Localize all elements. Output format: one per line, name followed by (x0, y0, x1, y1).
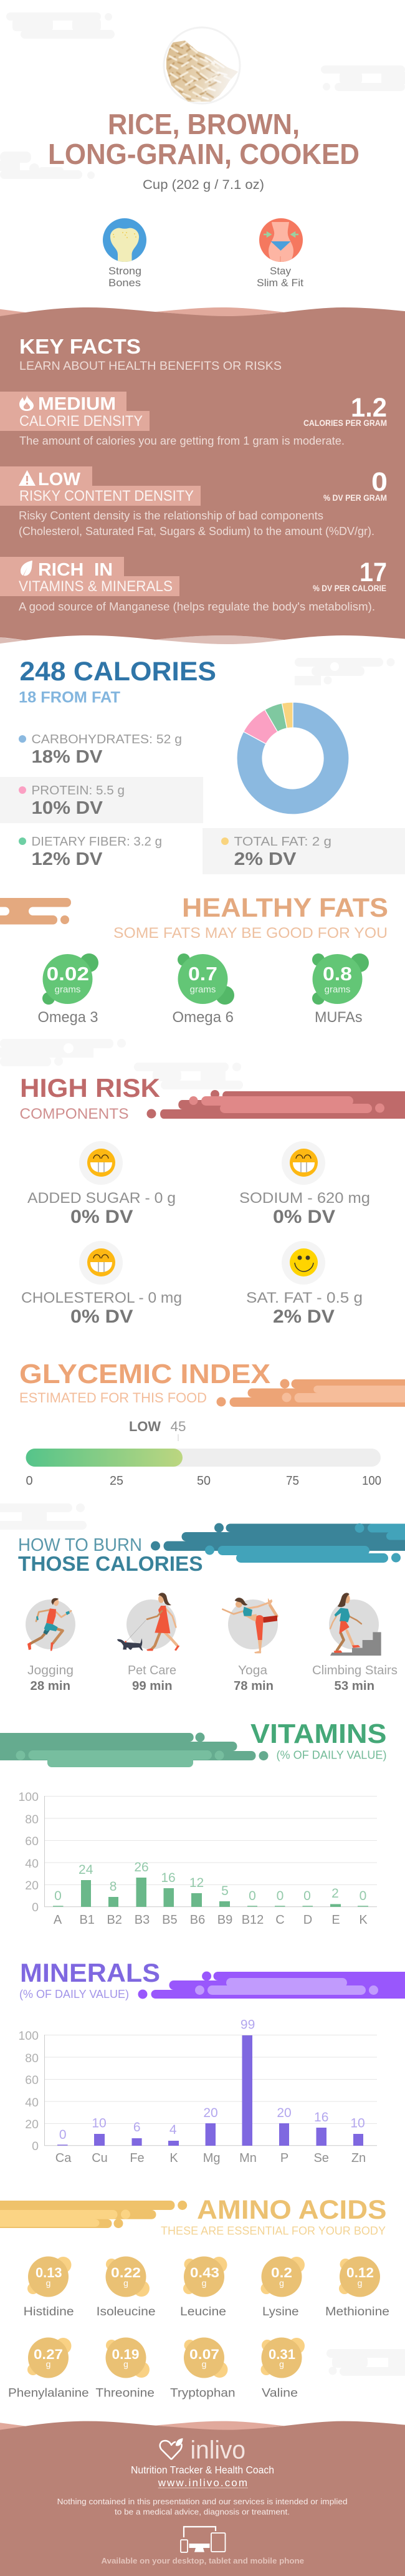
bar chart: vitamins (18, 1790, 377, 1927)
risk: saturated fat: 2% DV (273, 1306, 335, 1327)
icon: leaf (21, 561, 32, 576)
macro: dietary fiber: DIETARY FIBER: 3.2 g (31, 835, 162, 849)
amino: leucine (180, 2256, 227, 2318)
activity: pet care: 99 min (132, 1679, 172, 1693)
bar chart: vitamins: 40 (25, 1857, 39, 1871)
heading: 248 calories (19, 657, 216, 706)
decoration: vitamins streak (0, 1732, 268, 1767)
figure: jogger (27, 1598, 71, 1651)
fact: risky content density: Risky Content density is the relationship of bad components (19, 509, 323, 522)
heading: vitamins: (% OF DAILY VALUE) (277, 1749, 386, 1761)
amino: valine: Valine (262, 2387, 298, 2400)
fact: calorie density: CALORIES PER GRAM (303, 418, 387, 428)
heading: how to burn those calories (18, 1535, 203, 1575)
heading: healthy fats (113, 893, 388, 942)
section: minerals (18, 1958, 405, 2165)
bar chart: minerals: 10 (350, 2116, 365, 2131)
fact: rich in vitamins and minerals: 17 (360, 557, 387, 587)
gauge: glycemic value: 25 (110, 1474, 123, 1488)
fat: mufas: grams (325, 984, 350, 995)
bar chart: minerals: 0 (32, 2139, 39, 2153)
decoration: glycemic streak (217, 1379, 405, 1407)
bar chart: vitamins: 2 (331, 1886, 339, 1901)
decoration: burn streak (151, 1523, 405, 1563)
bar chart: minerals: 80 (25, 2052, 39, 2065)
macro: carbohydrates: 18% DV (31, 747, 103, 767)
bar chart: vitamins: D (303, 1913, 312, 1927)
label: Slim & Fit (257, 277, 303, 289)
bar chart: vitamins: 26 (134, 1860, 149, 1874)
fat: omega 6 (172, 953, 234, 1026)
risk: sodium: SODIUM - 620 mg (239, 1190, 370, 1207)
figure: woman in yoga pose (222, 1598, 277, 1653)
gauge: glycemic value: 100 (362, 1474, 381, 1488)
risk: saturated fat: SAT. FAT - 0.5 g (246, 1290, 363, 1306)
gauge: glycemic value (26, 1419, 381, 1488)
activity: pet care: Pet Care (128, 1664, 176, 1677)
title: LONG-GRAIN, COOKED (48, 138, 360, 170)
decoration: minerals streak (138, 1972, 405, 1999)
background cloud: burn calories (0, 1503, 87, 1530)
amino: histidine: Histidine (24, 2305, 74, 2318)
bar chart: vitamins: B5 (162, 1913, 178, 1927)
risk: cholesterol (21, 1241, 182, 1327)
activity: climbing stairs: 53 min (334, 1679, 374, 1693)
fat: mufas: MUFAs (315, 1009, 363, 1026)
fat: omega 3 (37, 953, 98, 1026)
amino: phenylalanine: g (46, 2359, 50, 2369)
heading: amino acids: THESE ARE ESSENTIAL FOR YOUR BODY (161, 2225, 386, 2237)
icon: slim waist (259, 218, 303, 263)
bar chart: vitamins: B6 (190, 1913, 205, 1927)
amino: histidine: g (46, 2278, 50, 2288)
tagline and website: Nutrition Tracker & Health Coach (131, 2464, 274, 2476)
bar chart: vitamins: A (54, 1913, 62, 1927)
heading: minerals: MINERALS (20, 1958, 160, 1987)
heading: how to burn those calories: HOW TO BURN (18, 1535, 142, 1555)
fat: mufas: 0.8 (323, 963, 352, 985)
gauge: glycemic value: LOW (129, 1419, 161, 1434)
background cloud: calories (295, 658, 395, 685)
bar chart: vitamins: 8 (110, 1879, 117, 1894)
bar chart: minerals: 0 (59, 2128, 67, 2142)
fact: rich in vitamins and minerals: VITAMINS & MINERALS (19, 578, 173, 595)
heading: minerals (19, 1958, 160, 2000)
heading: key facts (19, 335, 282, 373)
bar chart: minerals: Mg (203, 2151, 220, 2165)
bar chart: vitamins: 0 (249, 1889, 256, 1903)
bar chart: vitamins: K (359, 1913, 368, 1927)
risk: cholesterol: 0% DV (70, 1306, 133, 1327)
heading: glycemic index: GLYCEMIC INDEX (19, 1359, 270, 1389)
bar chart: minerals: Ca (55, 2151, 72, 2165)
icon: grinning face (79, 1141, 123, 1185)
icon: devices (181, 2527, 226, 2552)
tagline and website: www.inlivo.com (158, 2477, 247, 2489)
bar chart: vitamins: B1 (79, 1913, 95, 1927)
risk: added sugar: 0% DV (70, 1207, 133, 1227)
macro: protein: 10% DV (31, 798, 103, 818)
activity: jogging (26, 1598, 75, 1693)
amino: methionine: Methionine (325, 2305, 389, 2318)
bar chart: vitamins: 20 (25, 1879, 39, 1893)
benefit: strong bones (103, 218, 146, 289)
label: Bones (108, 277, 141, 289)
background cloud: high risk centre (134, 1063, 243, 1089)
bar chart: vitamins: 0 (54, 1889, 62, 1903)
amino: lysine: g (279, 2278, 284, 2288)
figure: woman climbing stairs (330, 1593, 381, 1656)
bar chart: minerals: 10 (92, 2116, 107, 2131)
section: high risk (20, 1073, 405, 1327)
decoration: healthy fats streak (0, 898, 72, 924)
amino: methionine: 0.12 (346, 2265, 374, 2280)
fact: rich in vitamins and minerals: % DV PER CALORIE (313, 584, 386, 593)
amino: methionine: g (358, 2278, 362, 2288)
bar chart: vitamins: B9 (217, 1913, 232, 1927)
gauge: glycemic value: 45 (171, 1419, 186, 1434)
icon: grinning face (79, 1241, 123, 1285)
macro: carbohydrates: CARBOHYDRATES: 52 g (31, 733, 182, 746)
bar chart: minerals: Fe (130, 2151, 145, 2165)
bar chart: minerals: 4 (169, 2123, 177, 2137)
heading: healthy fats: SOME FATS MAY BE GOOD FOR YOU (113, 925, 388, 942)
amino: lysine (260, 2256, 305, 2318)
background cloud: amino acids (326, 2349, 405, 2376)
risk: added sugar (27, 1141, 176, 1227)
fact: risky content density: LOW (38, 470, 81, 490)
risk: added sugar: ADDED SUGAR - 0 g (27, 1190, 176, 1207)
fat: omega 6: Omega 6 (172, 1009, 234, 1026)
title: RICE, BROWN, (108, 108, 300, 140)
icon: grinning face (282, 1141, 325, 1185)
panel: key facts (0, 307, 405, 644)
macro: protein: PROTEIN: 5.5 g (31, 784, 125, 798)
macro: total fat (202, 828, 405, 874)
amino: phenylalanine: Phenylalanine (8, 2387, 89, 2400)
fat: omega 3: grams (55, 984, 80, 995)
gauge: glycemic value: 75 (286, 1474, 299, 1488)
heading: amino acids (161, 2195, 386, 2237)
amino: valine (260, 2337, 305, 2400)
figure: woman walking dog (117, 1593, 179, 1651)
bar chart: minerals: P (280, 2151, 288, 2165)
section: how to burn those calories (18, 1523, 405, 1693)
bar chart: minerals: K (169, 2151, 178, 2165)
macro: dietary fiber (19, 835, 162, 869)
heading: healthy fats: HEALTHY FATS (182, 893, 388, 923)
label (108, 266, 141, 289)
fat: mufas (312, 953, 369, 1026)
fact: calorie density: 1.2 (351, 393, 387, 423)
heading: glycemic index (19, 1359, 270, 1406)
fat: omega 3: 0.02 (47, 963, 89, 985)
bar chart: vitamins: E (331, 1913, 340, 1927)
bar chart: minerals: 40 (25, 2096, 39, 2110)
amino: histidine: 0.13 (36, 2265, 62, 2280)
amino: lysine: 0.2 (271, 2265, 292, 2280)
amino: threonine (95, 2337, 155, 2400)
fat: omega 6: 0.7 (188, 963, 217, 985)
disclaimer: to be a medical advice, diagnosis or treatment. (115, 2507, 290, 2517)
macro: total fat: 2% DV (234, 849, 297, 869)
bar chart: minerals: 99 (241, 2018, 255, 2032)
heading: high risk components: COMPONENTS (20, 1106, 128, 1122)
heading: high risk components: HIGH RISK (20, 1073, 160, 1102)
icon: smiling face (282, 1241, 325, 1285)
risk: cholesterol: CHOLESTEROL - 0 mg (21, 1290, 182, 1306)
risk: saturated fat (246, 1241, 363, 1327)
bar chart: vitamins: 0 (360, 1889, 366, 1903)
background cloud: top left (6, 12, 115, 39)
macro: carbohydrates (19, 733, 182, 767)
activity: jogging: Jogging (27, 1664, 74, 1677)
background cloud: top right (321, 65, 405, 91)
amino: threonine: Threonine (95, 2387, 155, 2400)
bar chart: vitamins: 0 (303, 1889, 311, 1903)
amino: threonine: 0.19 (112, 2347, 140, 2362)
fact: calorie density: The amount of calories you are getting from 1 gram is moderate. (19, 435, 345, 447)
macro: protein (0, 777, 203, 823)
title (48, 108, 360, 170)
section: healthy fats (0, 893, 388, 1026)
bar chart: minerals: Se (313, 2151, 329, 2165)
tagline and website (131, 2464, 274, 2489)
bar chart: vitamins: 24 (79, 1863, 93, 1877)
heading: 248 calories: 18 FROM FAT (19, 688, 120, 706)
bar chart: vitamins: 100 (18, 1790, 39, 1804)
amino: valine: 0.31 (269, 2347, 295, 2362)
bar chart: minerals: Zn (351, 2151, 366, 2165)
activity: yoga: 78 min (234, 1679, 274, 1693)
amino: leucine: Leucine (180, 2305, 226, 2318)
bar chart: vitamins: 60 (25, 1835, 39, 1848)
amino: valine: g (279, 2359, 284, 2369)
amino: phenylalanine: 0.27 (34, 2347, 63, 2362)
serving size: Cup (202 g / 7.1 oz) (143, 178, 264, 192)
icon: flame (19, 395, 34, 411)
heading: how to burn those calories: THOSE CALORIES (18, 1552, 203, 1575)
heading: amino acids: AMINO ACIDS (197, 2195, 386, 2225)
amino: tryptophan: 0.07 (189, 2347, 219, 2362)
disclaimer (57, 2497, 348, 2517)
heading: vitamins (250, 1719, 386, 1761)
amino: isoleucine: 0.22 (111, 2265, 141, 2280)
amino: tryptophan: Tryptophan (170, 2387, 236, 2400)
heading: high risk components (20, 1073, 160, 1122)
section: vitamins (0, 1719, 386, 1927)
activity: yoga: Yoga (238, 1664, 268, 1677)
bar chart: minerals: Mn (239, 2151, 257, 2165)
fact: risky content density: 0 (371, 467, 388, 497)
icon: warning triangle (19, 470, 36, 486)
fact: rich in vitamins and minerals: RICH IN (38, 560, 113, 580)
availability note: Available on your desktop, tablet and mobile phone (101, 2556, 304, 2565)
fact: calorie density: CALORIE DENSITY (19, 413, 143, 430)
bar chart: vitamins: 5 (221, 1884, 229, 1898)
risk: sodium: 0% DV (273, 1207, 335, 1227)
amino: threonine: g (123, 2359, 128, 2369)
activity: jogging: 28 min (30, 1679, 70, 1693)
bar chart: minerals: 60 (25, 2073, 39, 2087)
fact: risky content density (0, 466, 388, 538)
background cloud: high risk left (0, 1039, 126, 1066)
amino: methionine (325, 2256, 389, 2318)
logo: inlivo (160, 2436, 245, 2464)
bar chart: vitamins: B3 (135, 1913, 150, 1927)
fact: risky content density: % DV PER GRAM (323, 493, 387, 503)
decoration: amino streak (0, 2201, 187, 2228)
bar chart: minerals: 20 (25, 2118, 39, 2131)
amino: tryptophan (170, 2337, 236, 2400)
amino: leucine: 0.43 (190, 2265, 219, 2280)
amino: histidine (24, 2256, 74, 2318)
heading: key facts: KEY FACTS (19, 335, 141, 358)
background cloud: left of title (0, 152, 95, 179)
gauge: glycemic value: 50 (197, 1474, 211, 1488)
bar chart: vitamins: B12 (242, 1913, 264, 1927)
heading: vitamins: VITAMINS (250, 1719, 386, 1749)
fact: risky content density: (Cholesterol, Saturated Fat, Sugars & Sodium) to the amount (%DV/gr). (19, 525, 374, 538)
donut chart: macronutrients (237, 702, 349, 814)
activity: climbing stairs (312, 1593, 398, 1693)
label (257, 266, 303, 289)
fact: rich in vitamins and minerals: A good source of Manganese (helps regulate the body's metabolism). (19, 601, 375, 613)
bar chart: minerals: 16 (314, 2110, 328, 2125)
amino: leucine: g (202, 2278, 206, 2288)
macro: total fat: TOTAL FAT: 2 g (234, 835, 331, 849)
bar chart: minerals: 100 (18, 2029, 39, 2043)
benefit: stay slim and fit (257, 218, 303, 289)
activity: pet care (117, 1593, 179, 1693)
amino: lysine: Lysine (262, 2305, 299, 2318)
bar chart: vitamins: 12 (189, 1876, 204, 1890)
section: glycemic index (19, 1359, 405, 1488)
fact: rich in vitamins and minerals (0, 557, 387, 613)
icon: bone (103, 218, 146, 263)
amino: isoleucine (97, 2256, 156, 2318)
bar chart: minerals (18, 2018, 377, 2165)
bar chart: vitamins: 0 (277, 1889, 284, 1903)
amino: isoleucine: g (123, 2278, 128, 2288)
label: Stay (270, 266, 292, 277)
header: food photo and title (48, 27, 360, 192)
bar chart: vitamins: 0 (32, 1901, 39, 1914)
activity: yoga (222, 1598, 278, 1693)
heading: minerals: (% OF DAILY VALUE) (19, 1988, 129, 2000)
disclaimer: Nothing contained in this presentation and our services is intended or implied (57, 2497, 348, 2506)
logo: inlivo: inlivo (191, 2436, 245, 2464)
heading: 248 calories: 248 CALORIES (20, 657, 216, 687)
heading: key facts: LEARN ABOUT HEALTH BENEFITS OR RISKS (19, 359, 282, 373)
amino: isoleucine: Isoleucine (97, 2305, 156, 2318)
bar chart: minerals: 20 (277, 2106, 292, 2120)
label: Strong (108, 266, 141, 277)
gauge: glycemic value: 0 (26, 1474, 33, 1488)
section: calories (0, 657, 405, 874)
bar chart: minerals: Cu (92, 2151, 108, 2165)
bar chart: minerals: 20 (203, 2106, 218, 2120)
decoration: high risk streak (147, 1090, 405, 1119)
fact: calorie density (0, 392, 387, 447)
panel: footer (0, 2421, 405, 2576)
macro: dietary fiber: 12% DV (31, 849, 103, 869)
amino: tryptophan: g (202, 2359, 206, 2369)
fact: calorie density: MEDIUM (38, 394, 116, 414)
bar chart: vitamins: B2 (107, 1913, 122, 1927)
fat: omega 6: grams (190, 984, 216, 995)
bar chart: vitamins: C (275, 1913, 285, 1927)
section: amino acids (0, 2195, 389, 2400)
bar chart: minerals: 6 (133, 2120, 141, 2135)
fat: omega 3: Omega 3 (37, 1009, 98, 1026)
fact: risky content density: RISKY CONTENT DENSITY (19, 488, 194, 504)
risk: sodium (239, 1141, 370, 1227)
activity: climbing stairs: Climbing Stairs (312, 1664, 398, 1677)
food photo: brown rice in circle (162, 27, 243, 106)
amino: phenylalanine (8, 2337, 89, 2400)
bar chart: vitamins: 80 (25, 1813, 39, 1826)
bar chart: vitamins: 16 (161, 1871, 176, 1885)
heading: glycemic index: ESTIMATED FOR THIS FOOD (19, 1390, 207, 1406)
